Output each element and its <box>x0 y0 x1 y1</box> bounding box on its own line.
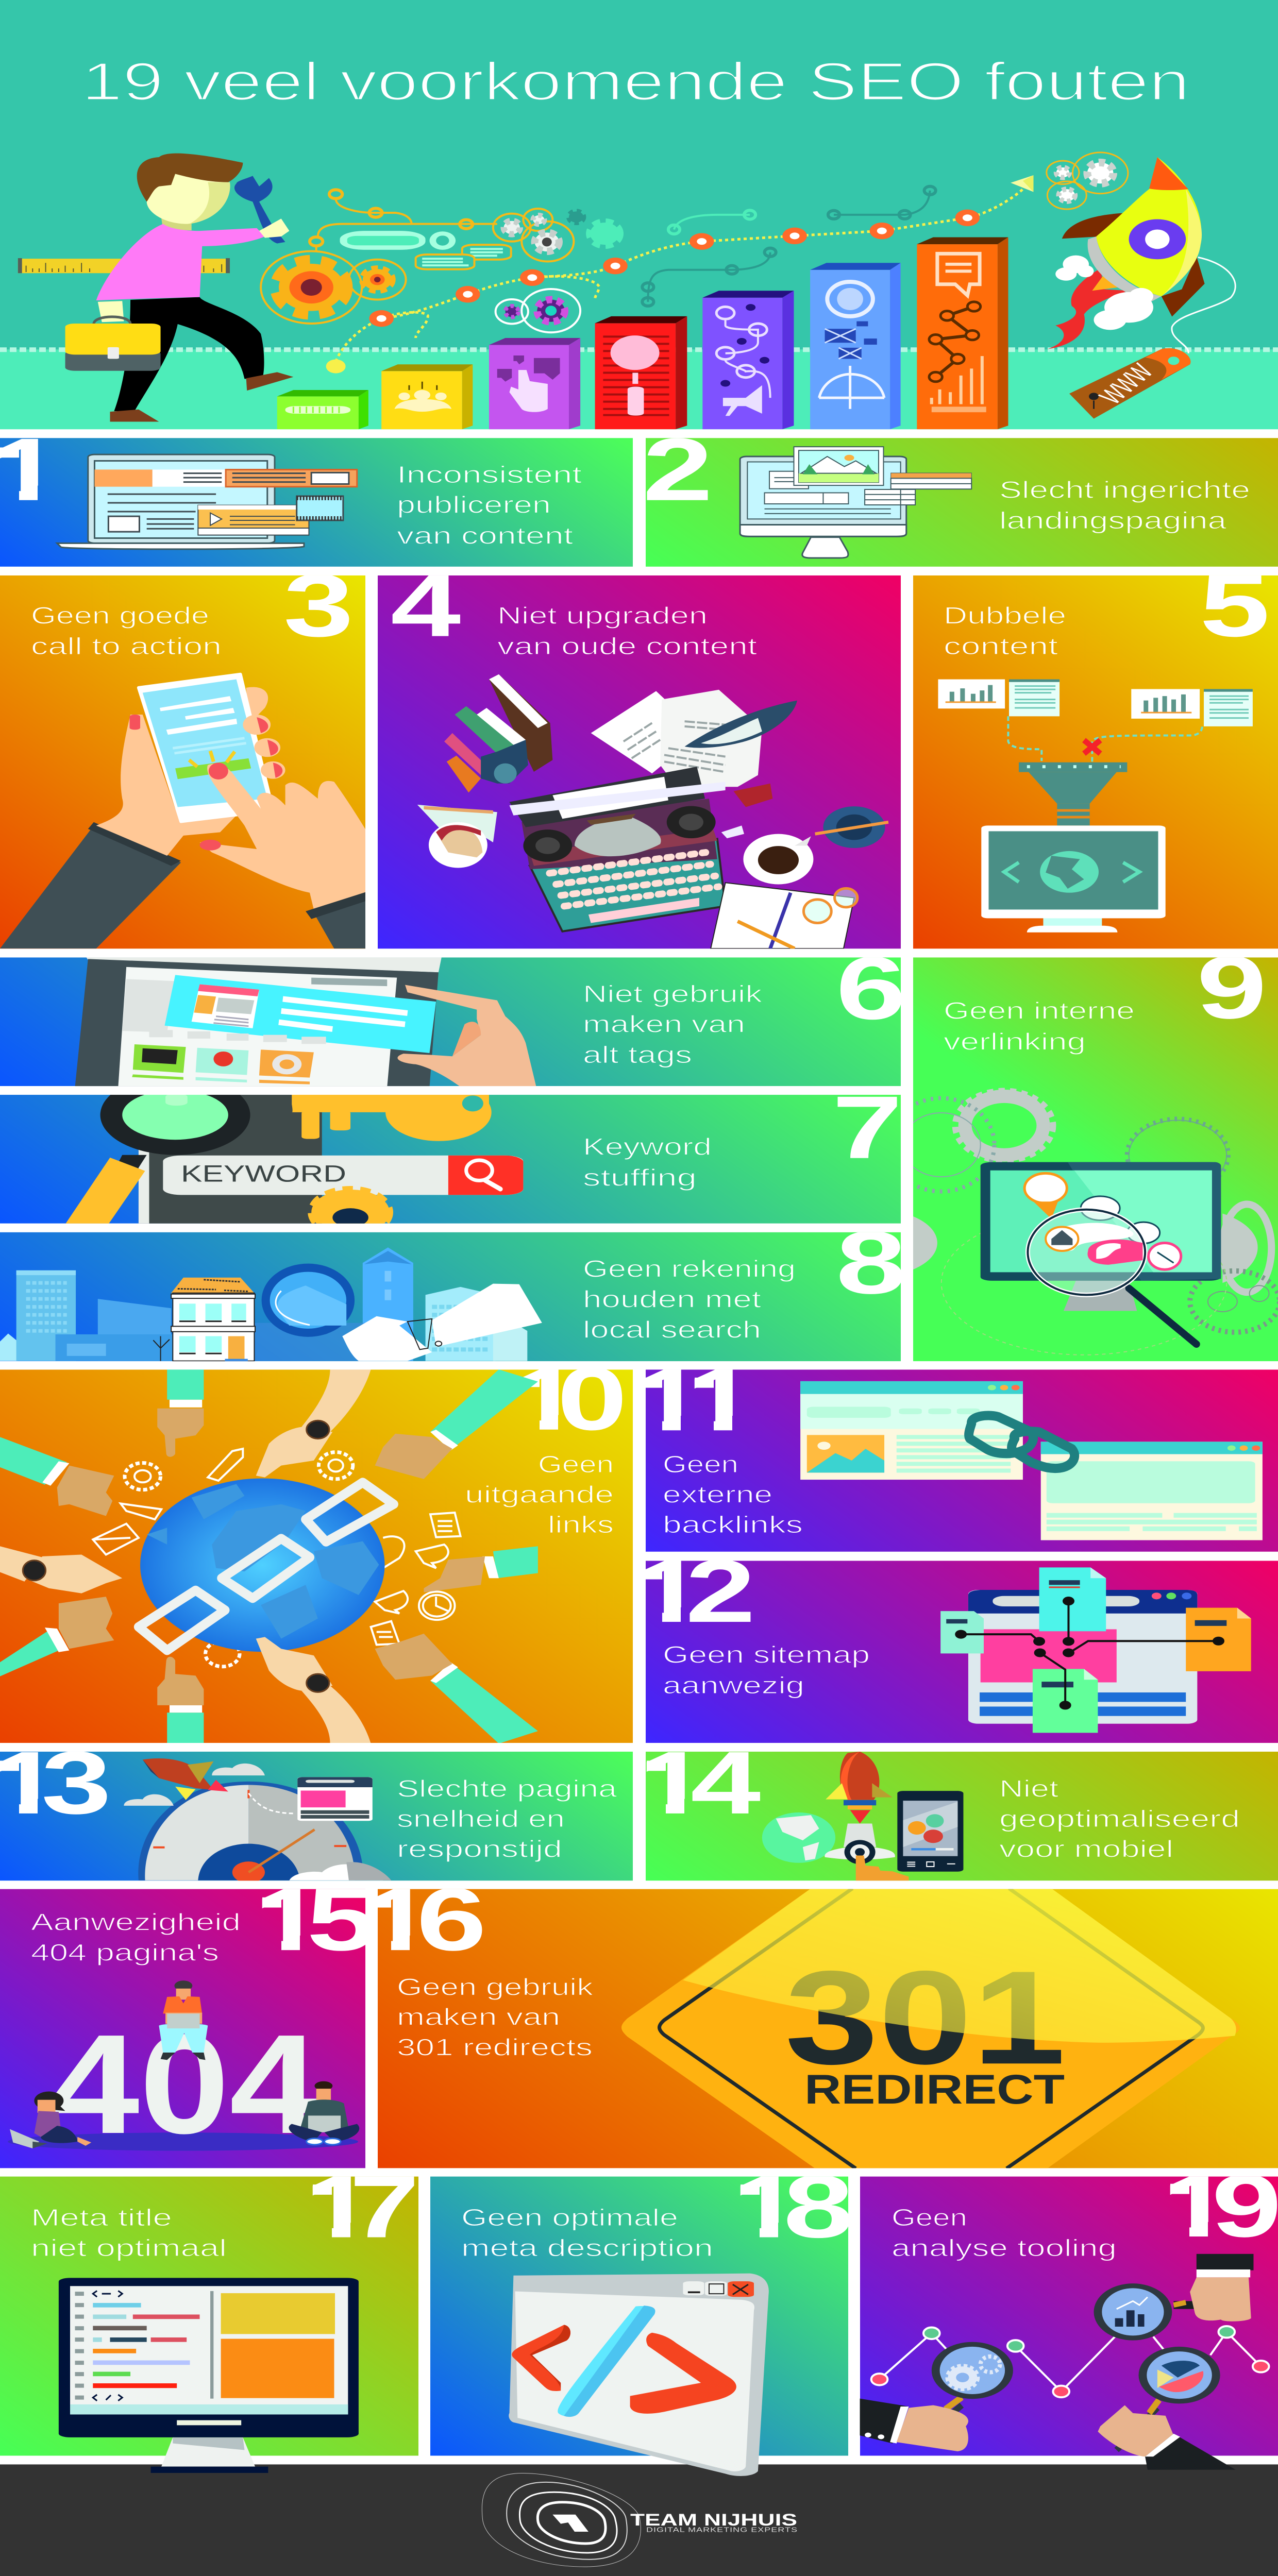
illustration: magnifier, key and search bar <box>65 1075 523 1235</box>
number 14: 4 <box>691 1733 761 1833</box>
number 3: 3 <box>283 555 354 655</box>
illustration: people with laptops <box>10 1980 359 2148</box>
number 17 <box>304 2157 419 2256</box>
rocket <box>143 1758 228 1800</box>
heading: responstijd <box>397 1836 562 1862</box>
number 10 <box>512 1349 627 1448</box>
bar 5 <box>702 291 794 429</box>
heading: stuffing <box>583 1164 697 1191</box>
number 6: 6 <box>836 938 906 1038</box>
heading: Geen <box>892 2204 967 2231</box>
icon: laptop with content blocks <box>57 454 357 549</box>
number 16: 1 <box>363 1870 433 1969</box>
icon: desktop monitor with code editor <box>59 2278 359 2473</box>
hands reaching <box>0 1369 538 1743</box>
number 18: 8 <box>783 2157 853 2256</box>
globe <box>762 1812 835 1863</box>
number 14: 1 <box>638 1733 708 1833</box>
document: green page <box>1033 1669 1098 1733</box>
heading: Aanwezigheid <box>31 1909 241 1936</box>
bar 2 <box>381 364 473 429</box>
heading: Niet upgraden <box>497 602 708 629</box>
heading: backlinks <box>663 1512 803 1538</box>
browser window A <box>800 1381 1023 1480</box>
sign text redirect: REDIRECT <box>804 2066 1065 2113</box>
number 15 <box>254 1870 377 1969</box>
number 11: 1 <box>686 1350 756 1449</box>
heading: Meta title <box>31 2204 172 2231</box>
panel 10: geen uitgaande links <box>0 1349 633 1743</box>
heading: snelheid en <box>397 1805 565 1833</box>
heading: 404 pagina's <box>31 1939 219 1966</box>
panel 9: geen interne verlinking <box>888 938 1278 1361</box>
heading <box>31 2204 227 2262</box>
heading <box>999 1775 1240 1862</box>
heading: local search <box>583 1316 761 1343</box>
number 13: 3 <box>41 1733 111 1833</box>
heading: Niet <box>999 1775 1058 1802</box>
heading <box>583 981 763 1069</box>
heading <box>583 1256 796 1343</box>
number 17: 7 <box>349 2157 419 2256</box>
icon: chain <box>969 1416 1074 1468</box>
heading: links <box>548 1512 614 1538</box>
number 10: 0 <box>557 1349 627 1448</box>
man with laptop <box>289 2081 359 2145</box>
illustration: hands around linked globe <box>0 1369 538 1743</box>
number 15: 5 <box>307 1870 377 1969</box>
panel 11: geen externe backlinks <box>634 1350 1278 1552</box>
monitor <box>981 1162 1221 1311</box>
globe <box>140 1478 385 1652</box>
illustration: ground shadow <box>8 2132 358 2151</box>
arrow: dotted growth path <box>326 175 1033 374</box>
illustration: duplicate pages through funnel <box>938 680 1253 933</box>
illustration: city with magnifier <box>0 1247 542 1362</box>
panel 17: meta title niet optimaal <box>0 2157 419 2473</box>
heading: publiceren <box>397 492 551 518</box>
person on top of zero <box>159 1980 208 2060</box>
sign plate <box>621 1888 1240 2168</box>
heading: Geen optimale <box>461 2204 678 2231</box>
panel 13: slechte pagina snelheid <box>0 1733 633 1883</box>
heading: call to action <box>31 633 222 660</box>
character: man with wrench and briefcase <box>65 154 293 422</box>
heading: Geen rekening <box>583 1256 796 1282</box>
panel 5: dubbele content <box>913 555 1278 948</box>
browser card <box>297 1777 373 1821</box>
clouds <box>124 1764 391 1880</box>
heading: Keyword <box>583 1133 712 1160</box>
monitor with globe <box>981 825 1166 933</box>
heading: Inconsistent <box>397 461 582 488</box>
footer <box>0 2464 1278 2576</box>
heading: Slechte pagina <box>397 1775 617 1802</box>
heading <box>497 602 757 660</box>
tag label: WWW <box>1092 359 1160 409</box>
heading: content <box>944 633 1058 660</box>
logo wordmark: TEAM NIJHUIS <box>630 2511 797 2529</box>
number 18 <box>732 2157 853 2256</box>
hand with gear magnifier <box>860 2342 1013 2451</box>
panel 7: keyword stuffing <box>0 1075 902 1235</box>
illustration: typewriter on desk <box>417 674 888 948</box>
icon: code window <box>509 2274 769 2476</box>
number 18: 1 <box>732 2157 802 2256</box>
number 19 <box>1162 2156 1278 2256</box>
number 13 <box>0 1733 111 1833</box>
number 9: 9 <box>1197 938 1267 1037</box>
heading: Geen <box>538 1451 614 1478</box>
number 8: 8 <box>836 1213 906 1312</box>
heading: van content <box>397 522 573 549</box>
heading <box>663 1641 870 1699</box>
panel 2: slecht ingerichte landingspagina <box>646 438 1278 567</box>
magnifier <box>1028 1210 1197 1344</box>
funnel <box>1019 762 1127 825</box>
road sign <box>621 1888 1240 2168</box>
circuit lines and gears <box>261 187 936 332</box>
heading: externe <box>663 1481 772 1508</box>
number 12: 1 <box>634 1541 704 1641</box>
heading: geoptimaliseerd <box>999 1805 1240 1833</box>
heading: Geen interne <box>944 997 1135 1024</box>
heading: Geen gebruik <box>397 1974 593 2001</box>
white doodle icons <box>93 1449 461 1667</box>
number 11 <box>634 1350 758 1449</box>
heading <box>465 1451 614 1538</box>
heading <box>31 1909 241 1966</box>
heading: analyse tooling <box>892 2235 1117 2262</box>
illustration: speed gauge with rocket <box>124 1758 391 1883</box>
paper sheets and quill <box>591 690 797 787</box>
panel 12: geen sitemap aanwezig <box>634 1541 1278 1743</box>
panel 1: inconsistent publiceren <box>0 438 633 567</box>
number 11: 1 <box>634 1350 704 1449</box>
hand with pie magnifier <box>1098 2347 1236 2470</box>
panel 3: geen goede call to action <box>0 555 428 948</box>
browser window B <box>1041 1442 1263 1540</box>
heading <box>892 2204 1117 2262</box>
bar chart: seven growing columns <box>277 238 1008 429</box>
heading: Slecht ingerichte <box>999 477 1250 503</box>
title: 19 veel voorkomende SEO fouten <box>81 52 1190 112</box>
background gears <box>888 1091 1278 1355</box>
illustration: rocket globe and phone <box>762 1752 963 1880</box>
rocket launch <box>825 1752 909 1880</box>
illustration: sitemap on browser <box>940 1567 1251 1733</box>
sign text 301: 301 <box>785 1943 1066 2092</box>
heading: landingspagina <box>999 507 1226 534</box>
search keyword: KEYWORD <box>181 1160 346 1187</box>
heading: Dubbele <box>944 602 1066 629</box>
number 16 <box>363 1870 486 1969</box>
woman with laptop <box>10 2092 91 2148</box>
heading <box>1001 481 1248 533</box>
number 15: 1 <box>254 1870 324 1969</box>
illustration: two browsers with chain <box>800 1381 1263 1540</box>
panel 6: niet gebruik maken van alt tags <box>0 938 906 1087</box>
illustration: gears and monitor with magnifier <box>888 1091 1278 1355</box>
logo rings <box>482 2473 641 2567</box>
number 17: 1 <box>304 2157 374 2256</box>
heading: Geen sitemap <box>663 1641 870 1668</box>
number 14 <box>638 1733 761 1833</box>
heading: Niet gebruik <box>583 981 763 1008</box>
heading <box>663 1451 803 1538</box>
panel 19: geen analyse tooling <box>860 2156 1278 2470</box>
heading: aanwezig <box>663 1672 804 1699</box>
notebook and glasses <box>711 883 857 948</box>
panel 15: aanwezigheid 404 pagina's <box>0 1870 377 2168</box>
number 1 <box>0 439 38 500</box>
heading: voor mobiel <box>999 1836 1173 1862</box>
logo tagline: DIGITAL MARKETING EXPERTS <box>646 2527 797 2534</box>
heading <box>461 2204 713 2262</box>
chain link <box>139 1482 394 1650</box>
icon: measuring ruler <box>18 258 230 273</box>
heading <box>944 997 1135 1055</box>
panel: hero <box>0 0 1278 429</box>
number 2: 2 <box>643 419 713 519</box>
number 12: 2 <box>685 1541 755 1641</box>
heading <box>397 1775 617 1862</box>
heading <box>583 1133 712 1191</box>
bar 4 <box>595 316 687 429</box>
document: mint page <box>940 1611 984 1653</box>
number 7: 7 <box>832 1077 902 1177</box>
bar 7 <box>917 238 1008 429</box>
panel 18: geen optimale meta description <box>430 2157 853 2476</box>
number 10: 1 <box>512 1349 582 1448</box>
icon: www tag <box>1069 348 1190 419</box>
bar 3 <box>489 338 580 429</box>
heading <box>31 602 222 660</box>
panel 14: niet geoptimaliseerd voor mobiel <box>638 1733 1278 1880</box>
typewriter body <box>509 767 726 931</box>
number 4: 4 <box>391 555 461 655</box>
heading: maken van <box>583 1011 745 1038</box>
bar 6 <box>810 263 901 429</box>
illustration: hands tapping a phone <box>0 674 428 948</box>
number 19: 1 <box>1162 2156 1232 2256</box>
number 12 <box>634 1541 755 1641</box>
hand with magnifier top <box>1094 2254 1254 2341</box>
document: cyan page <box>1039 1567 1106 1631</box>
duplicate documents <box>938 680 1253 761</box>
heading: van oude content <box>497 633 757 660</box>
heading: meta description <box>461 2235 713 2262</box>
teacup ashtray stationery <box>417 784 888 885</box>
logo: team nijhuis <box>482 2473 797 2567</box>
heading: uitgaande <box>465 1481 614 1508</box>
panel 8: geen rekening houden met local search <box>0 1213 906 1362</box>
bar 1 <box>277 390 368 429</box>
big 404: 404 <box>49 2005 321 2163</box>
smartphone <box>897 1791 963 1872</box>
document: orange page <box>1186 1608 1251 1671</box>
heading: houden met <box>583 1286 761 1313</box>
heading <box>397 1974 593 2061</box>
heading: alt tags <box>583 1041 692 1069</box>
heading <box>398 466 581 544</box>
heading: maken van <box>397 2004 560 2030</box>
heading: Geen goede <box>31 602 209 629</box>
icon: desktop monitor with landing page <box>740 447 971 558</box>
heading <box>944 602 1066 660</box>
illustration: tablet with hand <box>75 956 536 1087</box>
illustration: magnifiers and line chart <box>860 2254 1269 2470</box>
heading: 301 redirects <box>397 2034 593 2061</box>
heading: Geen <box>663 1451 738 1478</box>
illustration: rocket <box>1047 152 1235 353</box>
line chart <box>871 2326 1269 2397</box>
sitemap connectors <box>956 1598 1223 1708</box>
illustration: hero scene <box>18 152 1235 429</box>
panel 16: geen gebruik maken van 301 redirects <box>363 1870 1278 2168</box>
number 16: 6 <box>416 1870 486 1969</box>
books <box>444 674 552 792</box>
heading: niet optimaal <box>31 2235 227 2262</box>
number 5: 5 <box>1200 555 1270 655</box>
panel 4: niet upgraden van oude content <box>378 555 901 948</box>
heading: verlinking <box>944 1028 1086 1055</box>
sign highlight <box>683 1888 1236 2043</box>
